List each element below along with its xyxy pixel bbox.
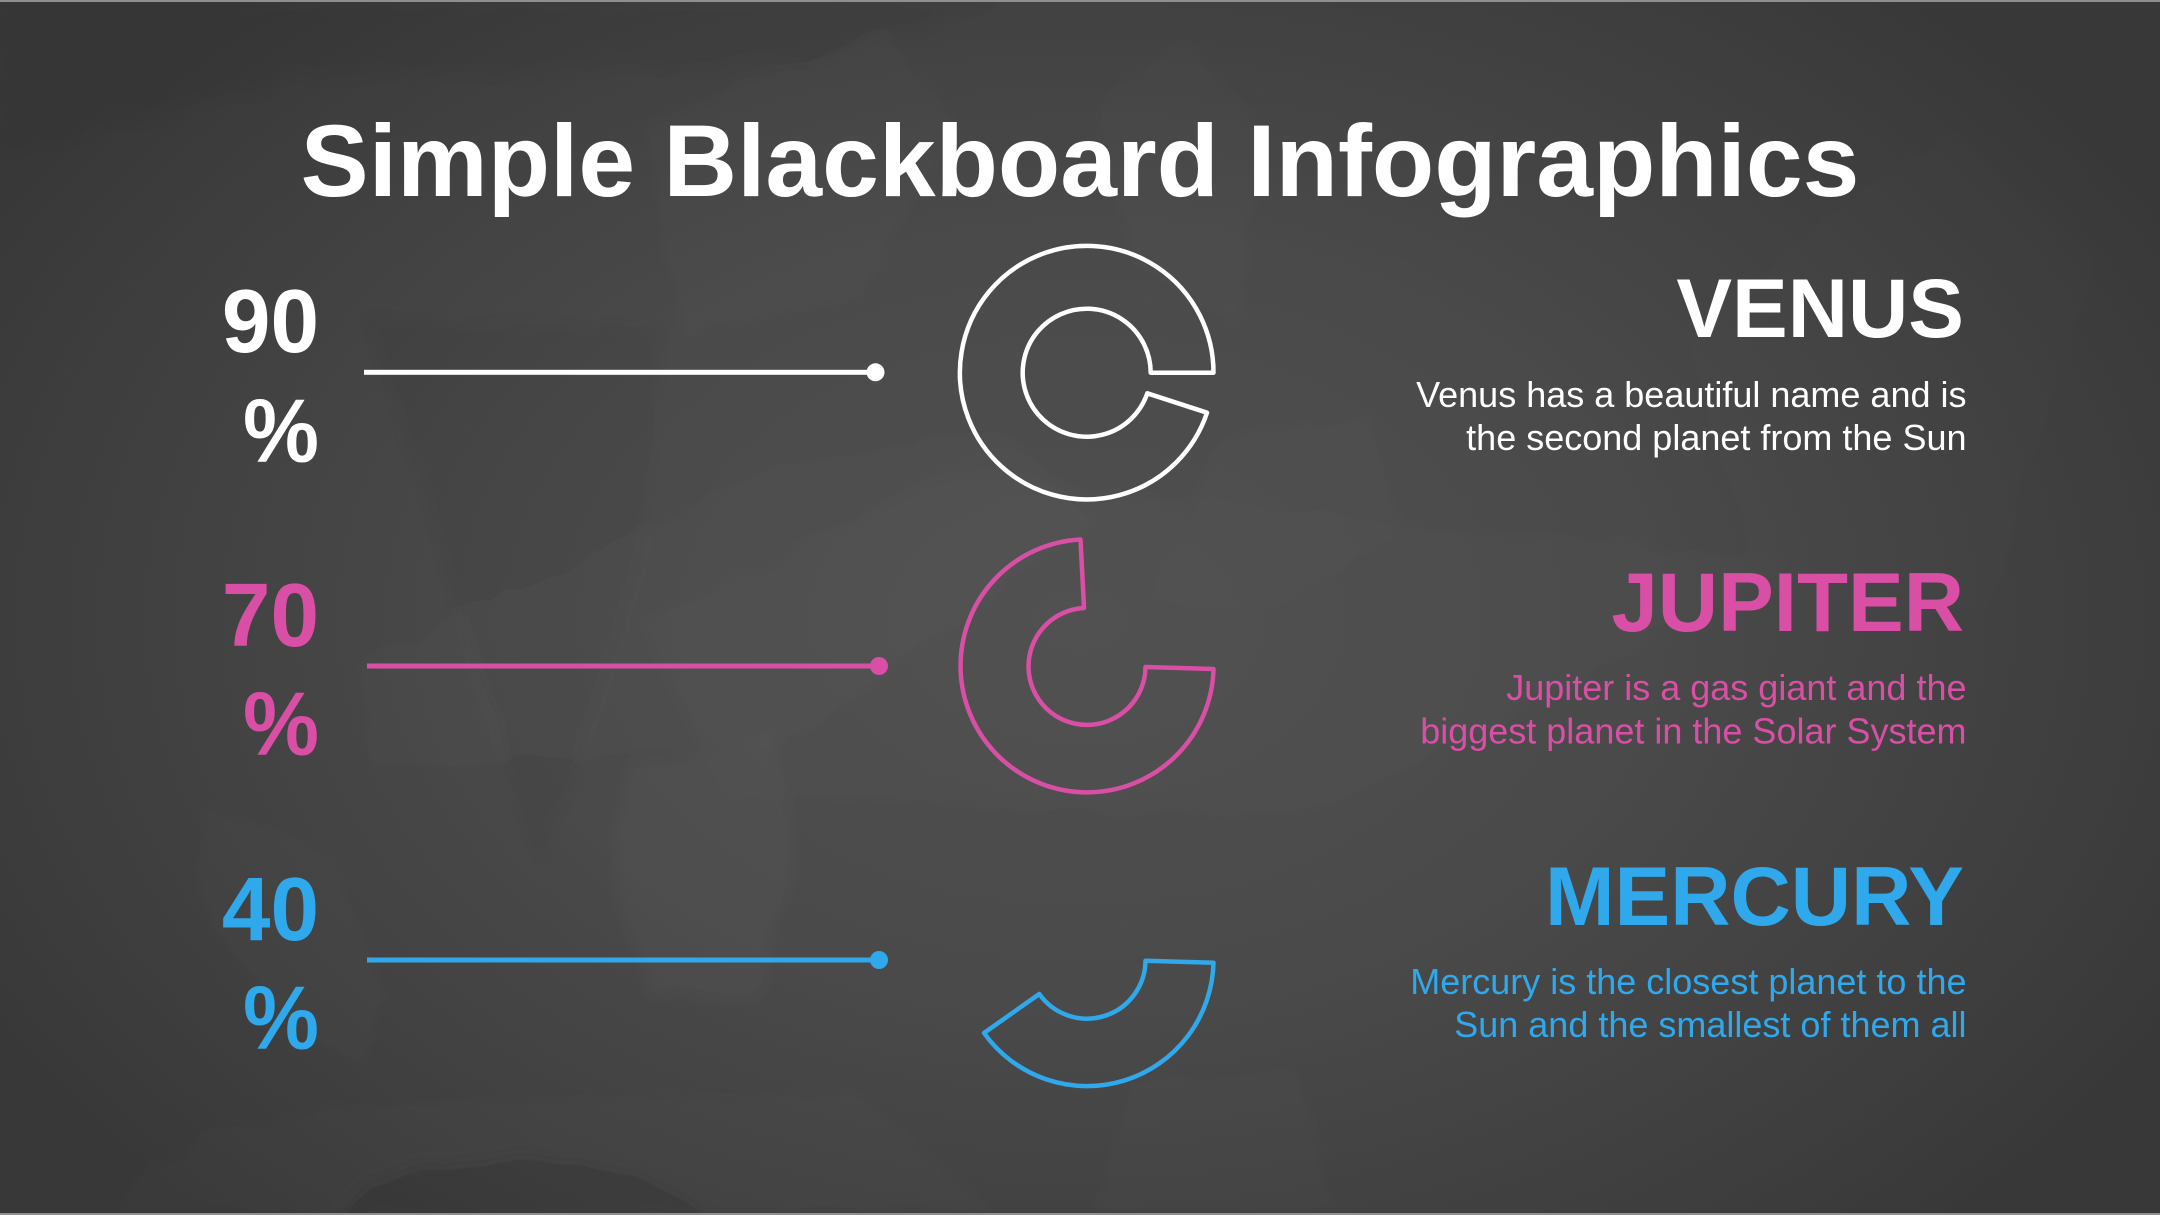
title: Simple Blackboard Infographics — [301, 104, 1859, 218]
donut chart: Jupiter 70 — [961, 540, 1214, 792]
description: Jupiter — [1420, 667, 1966, 752]
description: Venus: the second planet from the Sun — [1466, 417, 1966, 458]
row: Mercury — [222, 849, 1966, 1086]
planet name: Jupiter: JUPITER — [1611, 555, 1964, 649]
donut chart: Venus 90 — [960, 246, 1214, 499]
percentage: 40%: % — [243, 968, 319, 1068]
description: Mercury: Mercury is the closest planet to the — [1410, 961, 1966, 1002]
donut chart: Mercury 40 — [984, 961, 1214, 1086]
connector line: Venus — [364, 363, 884, 381]
row: Jupiter — [222, 540, 1966, 792]
percentage: 90% — [222, 271, 319, 481]
percentage: 90%: 90 — [222, 271, 319, 371]
percentage: 40% — [222, 859, 319, 1068]
percentage: 90%: % — [243, 381, 319, 481]
percentage: 70% — [222, 565, 319, 774]
planet name: Venus: VENUS — [1676, 261, 1964, 355]
description: Mercury — [1410, 961, 1966, 1045]
description: Jupiter: biggest planet in the Solar System — [1420, 710, 1966, 752]
description: Venus: Venus has a beautiful name and is — [1416, 374, 1966, 415]
percentage: 70%: 70 — [222, 565, 319, 665]
connector line: Mercury — [367, 951, 888, 969]
percentage: 40%: 40 — [222, 859, 319, 959]
row: Venus — [222, 246, 1966, 499]
planet name: Mercury: MERCURY — [1545, 849, 1964, 943]
description: Jupiter: Jupiter is a gas giant and the — [1506, 667, 1966, 708]
connector line: Jupiter — [367, 657, 888, 675]
description: Venus — [1416, 374, 1966, 458]
percentage: 70%: % — [243, 674, 319, 774]
description: Mercury: Sun and the smallest of them all — [1454, 1004, 1966, 1045]
